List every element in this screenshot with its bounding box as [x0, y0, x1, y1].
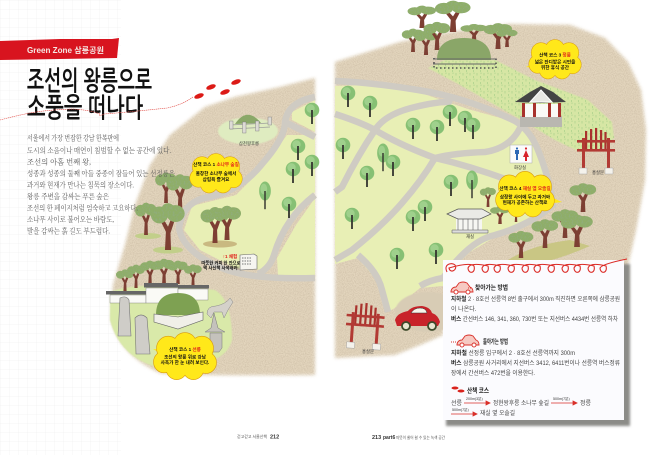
red gate: south — [344, 302, 385, 354]
section: getting there: 버스 간선버스 146, 341, 360, 730번 또는 지선버스 4434번 선릉역 하차 — [451, 315, 618, 323]
section: walking course: 500m(7분) — [553, 396, 570, 401]
section: getting there — [451, 282, 620, 323]
right map lollipop trees — [336, 86, 480, 269]
stone horse — [207, 298, 233, 318]
section: walking course — [451, 386, 592, 417]
callout: Jeongneung: 산책 코스 3 정릉 — [539, 52, 572, 58]
label: south gate: 홍살문 — [362, 348, 374, 354]
red spiral binding — [446, 259, 627, 272]
intro text block — [27, 134, 175, 236]
section: getting there: 지하철 2 · 8호선 선릉역 8번 출구에서 300m 직진하면 오른쪽에 삼릉공원 — [451, 295, 620, 303]
icon: red car — [395, 306, 440, 330]
title: 소풍을 떠나다 — [27, 94, 143, 122]
callout: Jeongneung — [526, 40, 581, 79]
callout: pine forest: 삼림욕 즐겨요 — [203, 176, 230, 183]
intro text block: 조선의 한 페이지처럼 엄숙하고 고요하다. — [27, 204, 138, 212]
callout: Seolleung — [153, 333, 216, 379]
footer: right page number: 213 — [372, 435, 381, 441]
right map paths — [335, 81, 553, 312]
intro text block: 소나무 사이로 불어오는 바람도, — [27, 215, 114, 224]
royal tomb scene: Seolleung — [106, 259, 233, 370]
section: getting there: 이 나온다. — [451, 305, 477, 313]
callout: pine forest: 울창한 소나무 숲에서 — [196, 170, 236, 177]
intro text block: 조선의 아홉 번째 왕, — [27, 158, 91, 166]
tip note with book icon: 따뜻한 커피 한 잔으로 — [201, 260, 241, 266]
section: walking course: 500m(7분) — [452, 407, 469, 412]
right side pine trees — [480, 183, 596, 262]
title — [27, 67, 152, 122]
footer: left page number: 212 — [270, 434, 279, 440]
callout: Seolleung: 사옥가 한 눈 내려 보인다. — [161, 359, 209, 366]
label: jaesil: 재실 — [466, 233, 474, 240]
footer: right page number — [372, 434, 445, 441]
footer: left page number: 걷고걷고 서울산책 — [237, 433, 267, 439]
hall: Jeongjagak — [515, 86, 566, 127]
callout: Jeongneung: 위한 휴식 공간 — [541, 64, 570, 71]
background grid paper — [0, 0, 121, 455]
red banner heading — [0, 38, 119, 60]
footer: right page number: 따뜻이 쉴어 쉴 수 있는 녹색 공간 — [396, 434, 445, 440]
intro text block: 성종과 성종의 둘째 아들 중종이 잠들어 있는 선정릉은 — [27, 169, 175, 178]
section: walking course: 선릉 — [451, 399, 463, 407]
label: tomb name: 삼천왕후릉 — [239, 140, 259, 147]
red dashed trail with footprints — [0, 78, 241, 120]
tip note with book icon: 맥 사신책 사색해봐! — [203, 264, 239, 272]
footer: right page number: part6 — [383, 435, 395, 441]
tomb: Samcheon royal tomb — [218, 115, 278, 147]
label: red gate: 홍살문 — [592, 169, 604, 175]
top tomb with trees — [402, 1, 518, 68]
left map lawn — [184, 100, 315, 279]
left map lollipop trees — [259, 103, 319, 218]
section: walking course: 재실 옆 오솔길 — [480, 409, 515, 417]
footer: left page number — [237, 433, 279, 440]
callout: pine forest: 산책 코스 1 소나무 숲길 — [193, 161, 239, 168]
callout: footpath by Jaesil — [496, 172, 562, 217]
section: return trip — [451, 335, 620, 377]
red banner heading: Green Zone 삼릉공원 — [27, 45, 104, 55]
section: walking course: 산책 코스 — [467, 386, 489, 394]
section: return trip: 장에서 간선버스 472번을 이용한다. — [451, 369, 535, 377]
callout: footpath by Jaesil: 산책 코스 4 재실 옆 오솔길 — [499, 185, 551, 192]
panel: directions — [443, 259, 630, 426]
callout: footpath by Jaesil: 현재가 공존하는 산책로 — [503, 199, 548, 206]
callout: Jeongneung: 넓은 잔디밭은 시민을 — [535, 58, 576, 66]
intro text block: 과거와 현재가 만나는 침묵의 장소이다. — [27, 180, 134, 190]
jaesil building — [447, 209, 491, 240]
left map ground — [111, 78, 315, 375]
section: return trip: 돌아가는 방법 — [483, 336, 508, 346]
section: return trip: 지하철 선정릉 입구에서 2 · 8호선 선릉역까지 300m — [451, 349, 575, 357]
right map grass near hall — [428, 60, 614, 152]
intro text block: 서울에서 가장 번잡한 강남 한복판에 — [27, 134, 119, 142]
callout: pine forest — [190, 154, 242, 193]
callout: Seolleung: 조선의 왕릉 위로 강남 — [164, 354, 207, 360]
stone lantern — [205, 313, 225, 352]
tip note with book icon: ↑1 체험 — [223, 253, 237, 260]
red gate: north — [577, 128, 615, 175]
right map ground — [335, 24, 646, 358]
stone statues — [118, 297, 150, 354]
label: restroom: 화장실 — [514, 164, 526, 171]
section: walking course: 정현왕후릉 소나무 숲길 — [493, 399, 549, 407]
section: return trip: 버스 삼릉공원 사거리에서 지선버스 3412, 6411번이나 선릉역 버스정류 — [451, 359, 620, 367]
left map pine trees — [135, 172, 241, 254]
callout: footpath by Jaesil: 삼정왕 사이에 두고 과거와 — [500, 194, 551, 200]
callout: Seolleung: 산책 코스 1 선릉 — [169, 346, 202, 353]
tip note with book icon — [201, 253, 257, 272]
intro text block: 발을 감싸는 흙 길도 부드럽다. — [27, 226, 110, 236]
section: walking course: 정릉 — [580, 400, 592, 407]
icon: footprints — [452, 386, 464, 392]
intro text block: 도시의 소음이나 매연이 침범할 수 없는 공간에 있다. — [27, 146, 171, 155]
title: 조선의 왕릉으로 — [27, 67, 152, 95]
left map paths — [179, 97, 315, 278]
car shadow ground — [395, 292, 461, 332]
intro text block: 왕릉 주변을 감싸는 푸른 숲은 — [27, 192, 109, 201]
section: walking course: 200m(3분) — [466, 396, 483, 401]
section: getting there: 찾아가는 방법 — [475, 282, 508, 292]
restroom sign — [510, 145, 532, 171]
icon: book — [240, 254, 257, 270]
right map lawn — [335, 85, 552, 312]
